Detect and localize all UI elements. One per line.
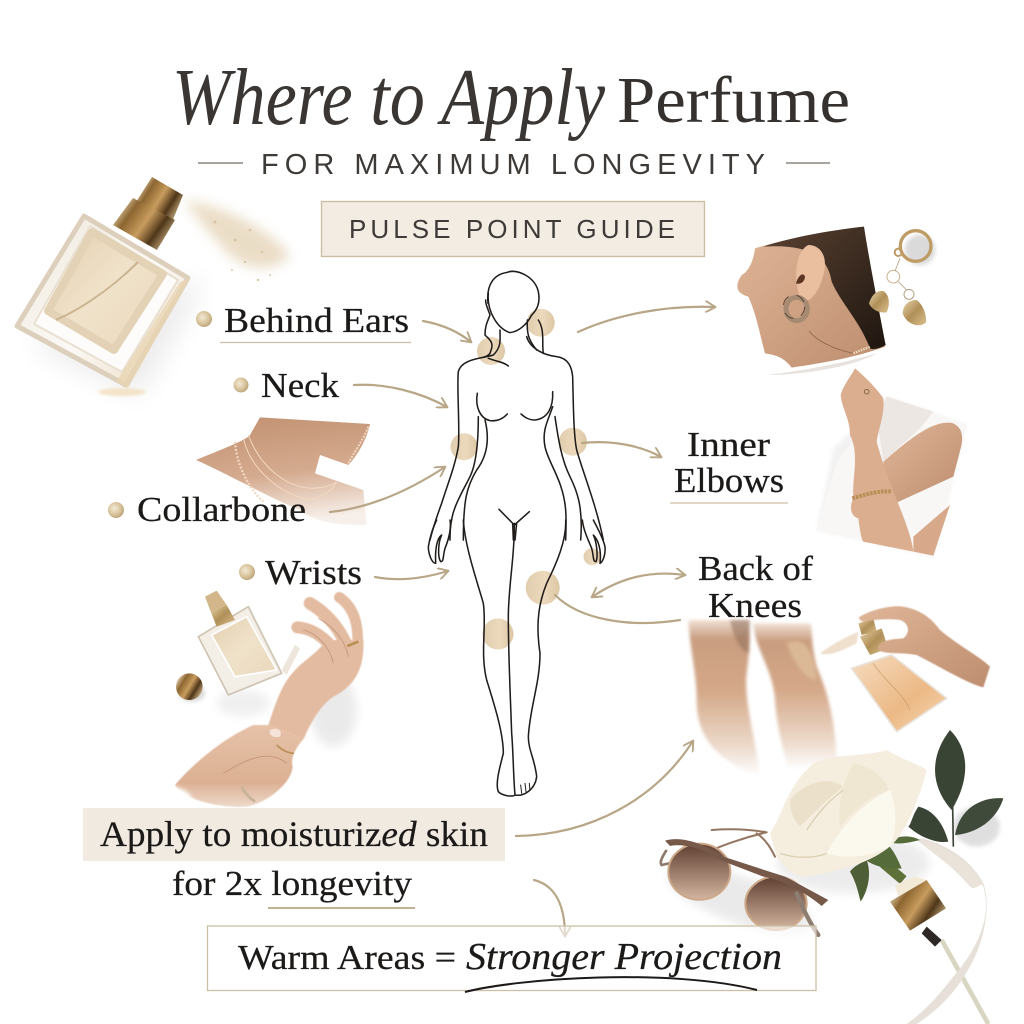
callout: warm areas box [208, 926, 816, 992]
arrow: down to bottom box [534, 880, 565, 936]
arrow: double headed [592, 574, 685, 597]
arrow: to ear photo [578, 307, 715, 332]
arrow: collarbone [330, 467, 445, 512]
label: back of knees [698, 549, 813, 625]
photo: hand spraying perfume [820, 606, 990, 732]
photo: knees [688, 620, 837, 777]
title: Where to Apply [172, 54, 605, 142]
label: neck: Neck [261, 366, 340, 405]
arrow: neck [354, 385, 447, 407]
label: behind ears: Behind Ears [224, 301, 409, 340]
callout: warm areas box: Stronger Projection [466, 936, 782, 978]
label: back of knees: Knees [708, 586, 802, 625]
photo: white rose with leaves, ribbon and gold clasp [770, 730, 1003, 1024]
badge: pulse point guide: PULSE POINT GUIDE [349, 214, 675, 244]
callout: moisturized skin tip: for 2x longevity [172, 864, 413, 903]
callout: moisturized skin tip [83, 808, 505, 908]
label: neck [234, 366, 340, 405]
photo: perfume bottle with spray [17, 177, 290, 396]
arrow: moisturized to knees [516, 741, 693, 836]
photo: collarbone with necklaces [196, 417, 370, 525]
label: inner elbows [670, 425, 788, 503]
icon: hand [175, 597, 363, 807]
label: back of knees: Back of [698, 549, 813, 588]
gold clasp [890, 877, 946, 947]
photo: inner elbow arms [817, 368, 967, 557]
icon: gold jewellery [869, 231, 935, 325]
photo: sunglasses [660, 829, 828, 948]
callout: moisturized skin tip: Apply to moisturiz ed skin [100, 814, 488, 854]
photo: wrist with small perfume [145, 591, 363, 813]
label: inner elbows: Elbows [674, 461, 784, 500]
arrow: inner elbows [582, 442, 661, 457]
pulse point circles [450, 309, 600, 650]
upper body [430, 271, 603, 540]
label: collarbone: Collarbone [137, 490, 306, 529]
lower body [428, 520, 605, 796]
ribbon [907, 838, 988, 1024]
icon: spray mist [184, 200, 290, 281]
arrow: wrists [375, 571, 448, 579]
label: inner elbows: Inner [687, 425, 770, 464]
subtitle: FOR MAXIMUM LONGEVITY [261, 149, 765, 181]
photo: ear and earring [737, 227, 935, 375]
title: Perfume [617, 64, 850, 137]
body outline figure [428, 271, 605, 796]
rose [770, 750, 927, 877]
leaves [850, 730, 1003, 902]
callout: warm areas box: Warm Areas = [238, 938, 456, 977]
label: wrists: Wrists [265, 553, 362, 592]
arrow: behind ears [423, 321, 471, 342]
badge: pulse point guide [322, 202, 704, 256]
arrow: back of knees line [555, 595, 680, 623]
